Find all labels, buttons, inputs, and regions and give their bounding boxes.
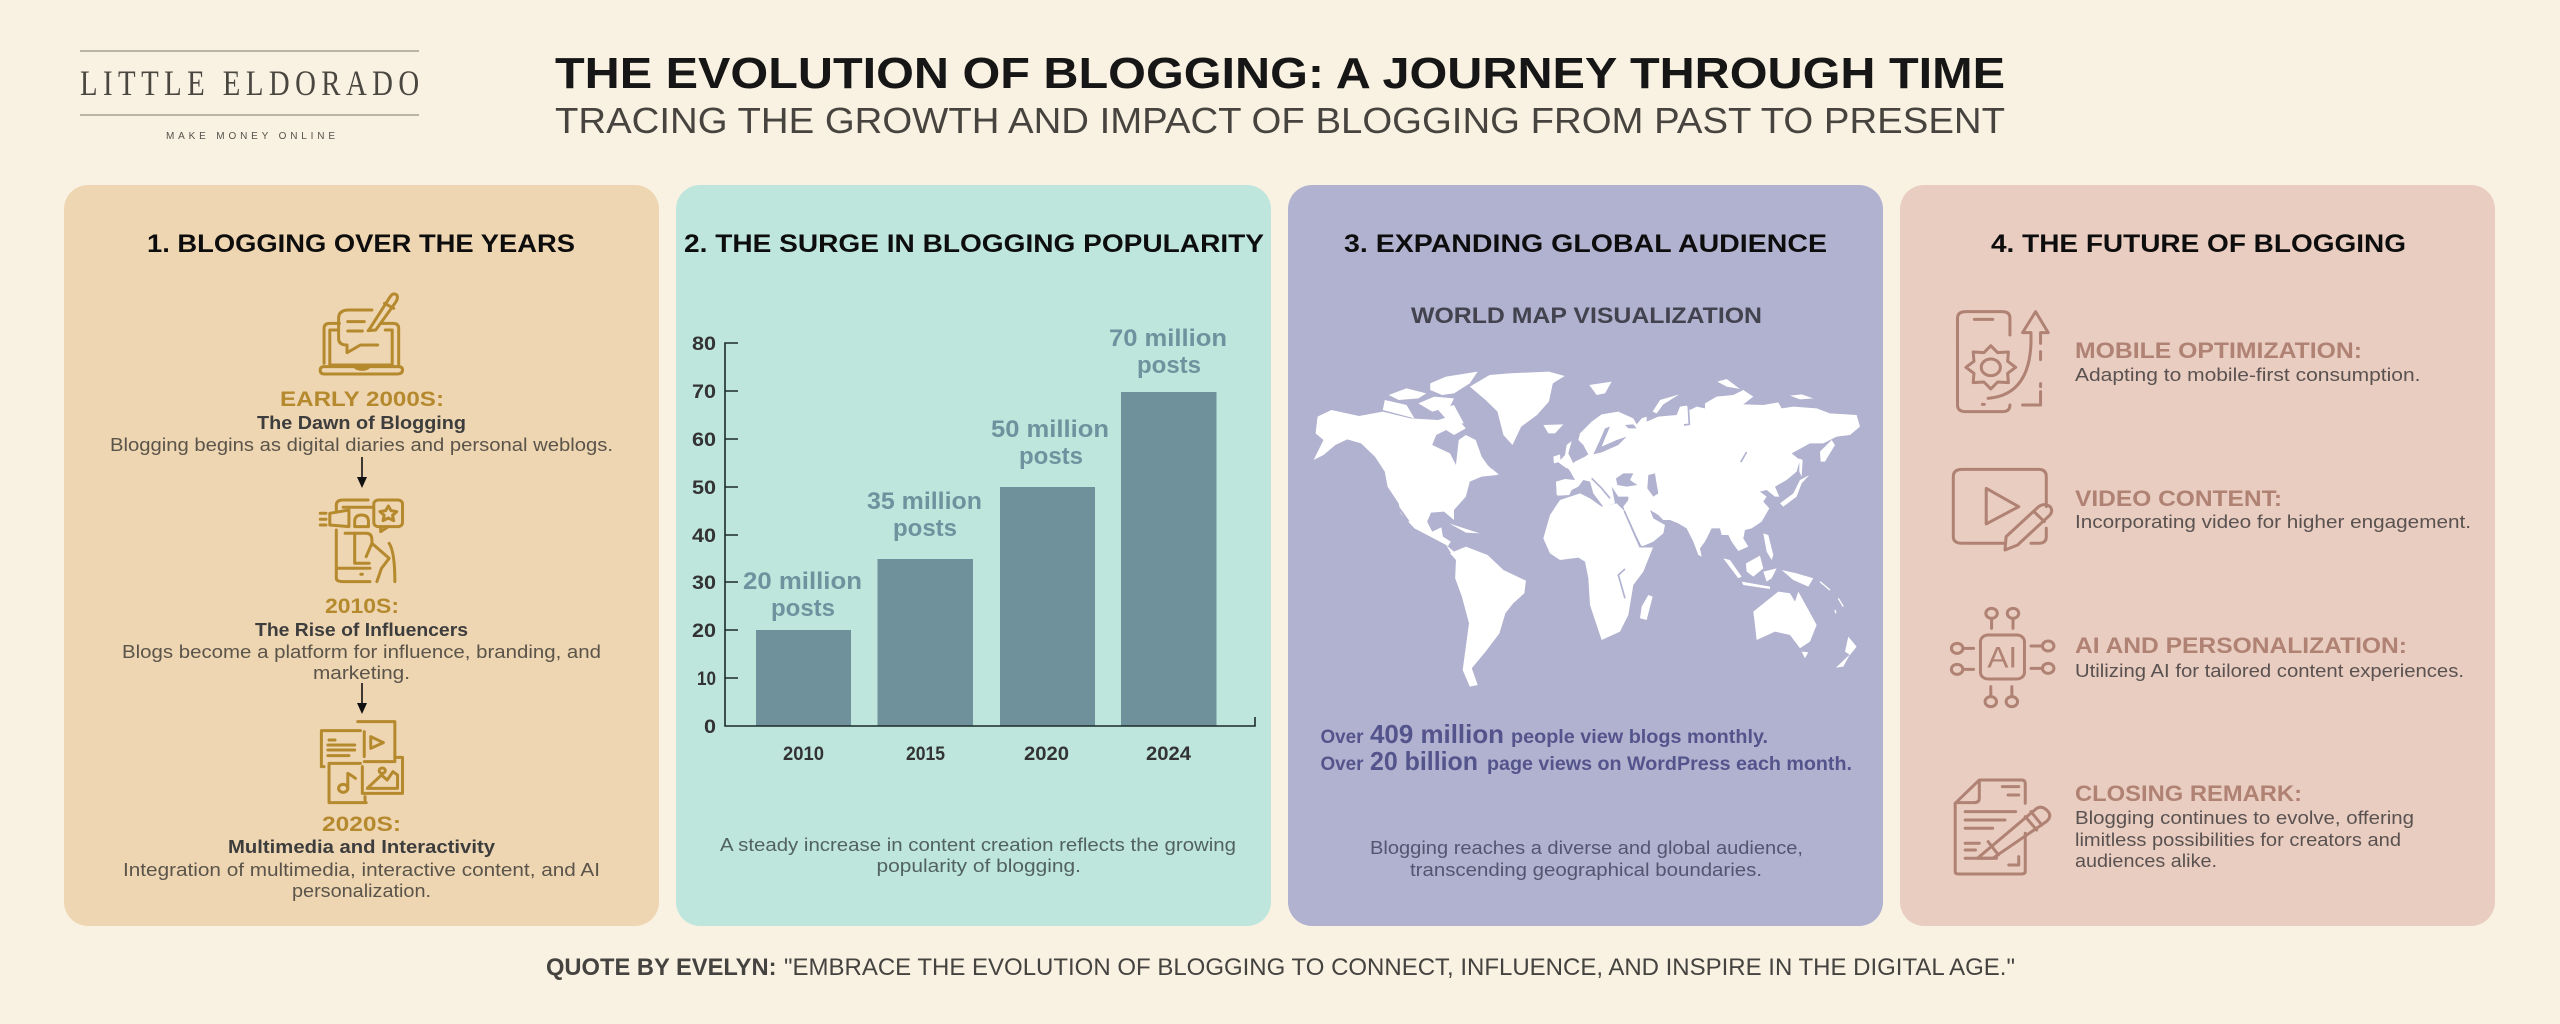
- panel: future of blogging: [1900, 185, 2495, 926]
- closing remark text: limitless possibilities for creators and: [2075, 829, 2401, 850]
- early 2000s text: The Dawn of Blogging: [257, 412, 466, 433]
- 2010s text: The Rise of Influencers: [255, 619, 468, 640]
- 2020s text: Integration of multimedia, interactive content, and AI: [123, 859, 600, 880]
- bar chart: 50 million: [991, 416, 1109, 443]
- icon: laptop with pen: [320, 294, 403, 374]
- video content text: Incorporating video for higher engagement.: [2075, 511, 2471, 532]
- bar chart: 2015: [906, 743, 945, 765]
- bar chart: 20 million: [743, 568, 862, 595]
- bar chart: 2024: [1146, 743, 1191, 765]
- arrow: [357, 683, 367, 714]
- bar chart: 30: [692, 573, 716, 594]
- audience stats: 409 million: [1370, 719, 1504, 749]
- mobile optimization text: MOBILE OPTIMIZATION:: [2075, 338, 2362, 363]
- logo: Little Eldorado: [80, 50, 419, 142]
- bar chart: [692, 325, 1255, 765]
- title: THE EVOLUTION OF BLOGGING: A JOURNEY THROUGH TIME: [555, 49, 2005, 98]
- 2010s text: Blogs become a platform for influence, branding, and: [122, 641, 601, 662]
- bar chart: 80: [692, 334, 716, 355]
- early 2000s text: [110, 388, 613, 455]
- bar chart: 50: [692, 478, 716, 499]
- arrow: [357, 457, 367, 488]
- bar chart: 10: [697, 669, 716, 690]
- panel: expanding global audience: [1288, 185, 1883, 926]
- icon: mobile optimization: [1958, 312, 2048, 412]
- map caption: [1370, 837, 1803, 880]
- logo: Little Eldorado: LITTLE ELDORADO: [80, 64, 419, 104]
- map caption: transcending geographical boundaries.: [1410, 859, 1762, 880]
- world map: [1314, 372, 1860, 687]
- bar chart: 70 million: [1109, 325, 1227, 352]
- panel: surge in blogging popularity: [676, 185, 1271, 926]
- video content text: VIDEO CONTENT:: [2075, 486, 2282, 511]
- panel: blogging over the years: [64, 185, 659, 926]
- bar chart: 35 million: [867, 488, 982, 515]
- AI and personalization text: AI AND PERSONALIZATION:: [2075, 633, 2407, 658]
- bar chart: 20: [692, 621, 716, 642]
- panel: blogging over the years: 1. BLOGGING OVER THE YEARS: [147, 230, 575, 258]
- 2020s text: Multimedia and Interactivity: [228, 836, 496, 857]
- bar chart: posts: [1019, 443, 1083, 470]
- mobile optimization text: [2075, 338, 2420, 385]
- quote: QUOTE BY EVELYN:: [546, 954, 776, 981]
- audience stats: Over: [1320, 727, 1364, 748]
- icon: multimedia tiles: [321, 722, 403, 803]
- chart caption: [720, 834, 1236, 876]
- panel: surge in blogging popularity: 2. THE SURGE IN BLOGGING POPULARITY: [684, 230, 1264, 258]
- AI and personalization text: Utilizing AI for tailored content experiences.: [2075, 660, 2464, 681]
- 2010s text: marketing.: [313, 662, 410, 683]
- chart caption: A steady increase in content creation reflects the growing: [720, 834, 1236, 855]
- audience stats: people view blogs monthly.: [1511, 727, 1768, 748]
- 2020s text: personalization.: [292, 880, 431, 901]
- mobile optimization text: Adapting to mobile-first consumption.: [2075, 364, 2420, 385]
- icon: influencer phone: [320, 500, 403, 582]
- icon: AI chip: [1951, 608, 2054, 707]
- chart caption: popularity of blogging.: [876, 855, 1081, 876]
- bar chart: 60: [692, 430, 716, 451]
- closing remark text: Blogging continues to evolve, offering: [2075, 807, 2414, 828]
- logo: Little Eldorado: MAKE MONEY ONLINE: [166, 131, 335, 142]
- closing remark text: [2075, 781, 2414, 871]
- bar chart: posts: [1137, 352, 1201, 379]
- video content text: [2075, 486, 2471, 532]
- 2020s text: [123, 813, 600, 901]
- 2010s text: 2010S:: [325, 595, 399, 618]
- 2020s text: 2020S:: [322, 813, 401, 836]
- icon: document and pencil: [1955, 780, 2050, 874]
- early 2000s text: Blogging begins as digital diaries and personal weblogs.: [110, 434, 613, 455]
- audience stats: 20 billion: [1370, 746, 1478, 776]
- bar chart: posts: [771, 595, 835, 622]
- AI and personalization text: [2075, 633, 2464, 681]
- 2010s text: [122, 595, 601, 683]
- icon: AI chip: AI: [1987, 640, 2017, 674]
- bar chart: 40: [692, 526, 716, 547]
- map caption: Blogging reaches a diverse and global audience,: [1370, 837, 1803, 858]
- bar chart: 70: [692, 382, 716, 403]
- audience stats: page views on WordPress each month.: [1487, 754, 1852, 775]
- audience stats: Over: [1320, 754, 1364, 775]
- map heading: WORLD MAP VISUALIZATION: [1411, 303, 1762, 328]
- panel: future of blogging: 4. THE FUTURE OF BLOGGING: [1991, 230, 2406, 258]
- icon: video content: [1953, 469, 2052, 550]
- bar chart: 2020: [1024, 743, 1069, 765]
- bar chart: posts: [893, 515, 957, 542]
- bar chart: 0: [704, 717, 716, 738]
- quote: "EMBRACE THE EVOLUTION OF BLOGGING TO CONNECT, INFLUENCE, AND INSPIRE IN THE DIGITAL AGE.": [784, 954, 2015, 981]
- audience stats: [1320, 719, 1852, 776]
- subtitle: TRACING THE GROWTH AND IMPACT OF BLOGGING FROM PAST TO PRESENT: [555, 100, 2005, 141]
- closing remark text: audiences alike.: [2075, 850, 2217, 871]
- bar chart: 2010: [783, 743, 824, 765]
- early 2000s text: EARLY 2000S:: [280, 388, 444, 411]
- panel: expanding global audience: 3. EXPANDING GLOBAL AUDIENCE: [1344, 230, 1827, 258]
- closing remark text: CLOSING REMARK:: [2075, 781, 2302, 806]
